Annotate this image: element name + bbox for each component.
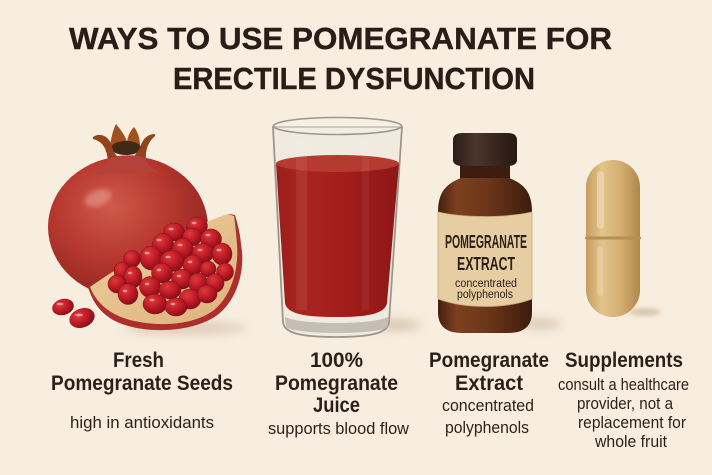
column text: juice: supports blood flow <box>268 420 409 438</box>
icon: loose seeds <box>50 296 97 331</box>
label <box>438 212 532 306</box>
column text: extract: polyphenols <box>445 419 529 437</box>
label: EXTRACT <box>457 254 515 274</box>
icon: pomegranate with cut wedge and seeds <box>48 124 247 335</box>
column text: supplements: replacement for <box>578 414 686 432</box>
column text: supplements: Supplements <box>565 348 683 372</box>
icon: extract bottle <box>438 133 562 333</box>
column text: juice: Pomegranate <box>275 371 398 395</box>
column text: extract: Extract <box>455 371 523 395</box>
cap <box>453 133 517 166</box>
neck <box>460 163 510 187</box>
icon: whole pomegranate <box>48 124 208 298</box>
column text: supplements: provider, not a <box>577 395 674 413</box>
column text: supplements: whole fruit <box>594 433 667 451</box>
column text: extract: concentrated <box>442 397 534 415</box>
title: WAYS TO USE POMEGRANATE FOR <box>69 21 612 56</box>
glass rim <box>274 118 402 134</box>
title: ERECTILE DYSFUNCTION <box>173 61 535 96</box>
column text: extract <box>429 348 549 437</box>
column text: fresh seeds: high in antioxidants <box>70 414 214 432</box>
column text: juice: Juice <box>313 393 360 417</box>
column text: supplements <box>558 348 689 451</box>
column text: fresh seeds: Pomegranate Seeds <box>51 371 233 395</box>
juice <box>276 163 399 317</box>
glass body <box>273 127 402 337</box>
label: polyphenols <box>457 289 513 301</box>
icon: glass of juice <box>273 118 421 337</box>
title <box>69 21 612 96</box>
seeds <box>108 217 234 316</box>
icon: cut wedge <box>88 214 242 330</box>
column text: supplements: consult a healthcare <box>558 376 689 394</box>
glass base <box>285 317 388 333</box>
seed highlights <box>123 222 222 305</box>
icon: capsule <box>585 160 661 317</box>
bottle body <box>438 178 532 333</box>
label: POMEGRANATE <box>445 232 527 252</box>
reflection <box>296 140 307 310</box>
column text: fresh seeds: Fresh <box>113 348 164 372</box>
column text: juice <box>268 348 409 438</box>
column text: fresh seeds <box>51 348 233 432</box>
column text: extract: Pomegranate <box>429 348 549 372</box>
label: concentrated <box>455 278 517 290</box>
column text: juice: 100% <box>310 348 363 372</box>
